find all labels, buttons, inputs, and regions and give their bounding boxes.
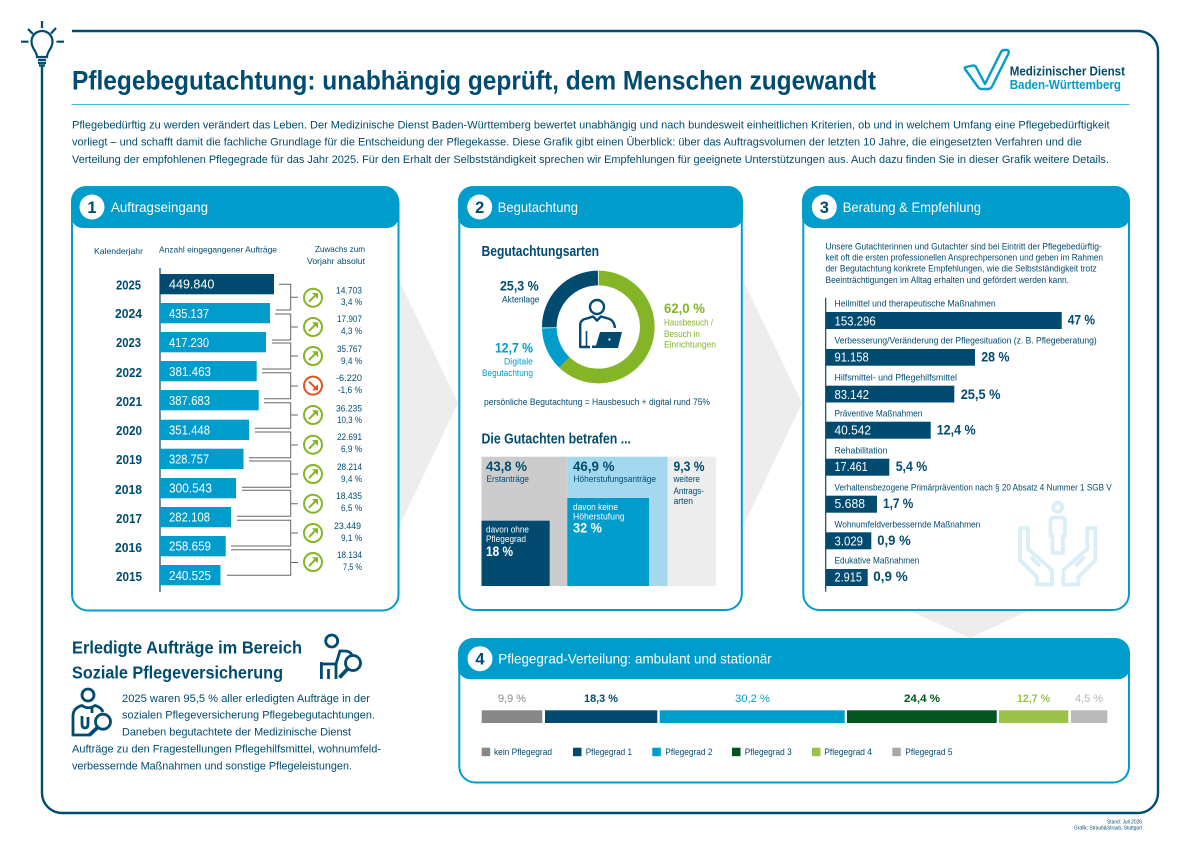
proportional block chart: davon ohne: [486, 525, 529, 535]
proportional block chart: 46,9 %: [573, 458, 615, 474]
logo: Baden-Württemberg: [1010, 78, 1121, 92]
donut labels: [482, 278, 716, 378]
stacked bar: Pflegegrade: 24,4 %: [904, 693, 940, 705]
icon: light bulb: [21, 21, 64, 66]
legend: Pflegegrad 4: [824, 747, 872, 757]
proportional block chart: weitere: [673, 474, 700, 484]
growth values: 35.767: [337, 344, 362, 354]
proportional block chart: Erstanträge: [486, 474, 529, 484]
donut labels: Aktenlage: [502, 295, 540, 305]
bar chart: Empfehlungen: 153.296: [834, 314, 876, 328]
growth values: 10,3 %: [337, 415, 362, 425]
proportional block chart: 18 %: [486, 543, 513, 559]
panel 4 header: Pflegegrad-Verteilung: ambulant und stationär: [498, 650, 772, 666]
panel 3 intro text: [826, 241, 1103, 285]
bar chart: Empfehlungen: 0,9 %: [873, 568, 908, 584]
heading: Die Gutachten betrafen: Die Gutachten betrafen ...: [482, 432, 631, 448]
stacked bar: Pflegegrade: 30,2 %: [735, 693, 770, 705]
brackets between years: [227, 284, 298, 575]
heading: [72, 637, 302, 682]
donut labels: 12,7 %: [495, 340, 533, 356]
bar chart: Empfehlungen: 40.542: [834, 423, 871, 437]
legend: [482, 747, 952, 757]
panel 3 intro text: keit oft die ersten professionellen Ansprechpersonen und geben im Rahmen: [826, 253, 1103, 263]
panel 1 header: Auftragseingang: [111, 199, 208, 215]
icon: doctor with magnifier: [73, 689, 110, 735]
proportional block chart: davon keine: [573, 502, 618, 512]
stacked bar: Pflegegrade: 9,9 %: [498, 693, 526, 705]
donut chart: [529, 258, 668, 396]
panel 3 header: 3: [820, 199, 829, 217]
heading: Begutachtungsarten: Begutachtungsarten: [482, 244, 599, 260]
donut labels: Besuch in: [664, 329, 700, 339]
panel 3: Beratung & Empfehlung: [802, 186, 1130, 610]
bar chart: Aufträge je Jahr: 2017: [116, 512, 142, 526]
legend: Pflegegrad 2: [665, 747, 712, 757]
growth values: 4,3 %: [341, 326, 362, 336]
bar chart: Aufträge je Jahr: 449.840: [169, 278, 214, 292]
donut labels: Einrichtungen: [664, 340, 716, 350]
donut labels: Begutachtung: [482, 368, 533, 378]
growth values: 7,5 %: [343, 562, 362, 572]
bar chart: Aufträge je Jahr: 387.683: [169, 394, 210, 408]
bar chart: Aufträge je Jahr: 2019: [116, 453, 142, 467]
bar chart: Aufträge je Jahr: 435.137: [169, 307, 209, 321]
bar chart: Empfehlungen: Heilmittel und therapeutische Maßnahmen: [834, 299, 996, 309]
column headers: Anzahl eingegangener Aufträge: [159, 245, 277, 255]
panel 3 intro text: Beeinträchtigungen im Alltag erhalten und gefördert werden kann.: [826, 275, 1069, 285]
growth values: 22.691: [337, 432, 362, 442]
donut labels: 62,0 %: [664, 300, 706, 316]
bar chart: Aufträge je Jahr: 2018: [115, 483, 142, 497]
growth values: 3,4 %: [341, 297, 362, 307]
flow chevron: panel 2 to 3: [743, 280, 802, 527]
bar chart: Aufträge je Jahr: 258.659: [169, 540, 211, 554]
note: personal assessment: persönliche Begutachtung = Hausbesuch + digital rund 75%: [484, 397, 710, 407]
proportional block chart: 9,3 %: [674, 458, 705, 474]
bar chart: Empfehlungen: 47 %: [1068, 311, 1095, 327]
bar chart: Empfehlungen: [826, 298, 1112, 592]
panel 2 header: Begutachtung: [498, 199, 578, 215]
intro text: vorliegt – und schafft damit die fachliche Grundlage für die Entscheidung der Pflegekasse. Diese Grafik gibt einen Überblick: über das Auftragsvolumen der letzten 10 Jahre, die eingesetzten Verfahren und die: [72, 137, 1082, 149]
bar chart: Aufträge je Jahr: 282.108: [169, 510, 210, 524]
bar chart: Empfehlungen: 0,9 %: [877, 532, 911, 548]
panel 4: Pflegegrad-Verteilung: [458, 638, 1130, 782]
title: Pflegebegutachtung: unabhängig geprüft, dem Menschen zugewandt: [72, 65, 876, 95]
heading: Erledigte Aufträge im Bereich: [72, 637, 302, 657]
bar chart: Aufträge je Jahr: 2021: [116, 395, 142, 409]
panel 3 header: [802, 186, 1130, 228]
stacked bar: Pflegegrade: 18,3 %: [584, 693, 618, 705]
footer credits: Stand: Juli 2026: [1107, 820, 1142, 826]
panel 1 header: 1: [87, 199, 97, 217]
column headers: Kalenderjahr: [94, 246, 143, 256]
proportional block chart: arten: [674, 496, 693, 506]
icon: person with laptop: [580, 300, 622, 348]
bar chart: Empfehlungen: Präventive Maßnahmen: [834, 409, 922, 419]
proportional block chart: Höherstufungsanträge: [574, 474, 656, 484]
panel 4 header: 4: [475, 651, 485, 669]
bar chart: Aufträge je Jahr: 2022: [116, 366, 142, 380]
panel 1 header: [71, 186, 399, 228]
panel 1: Auftragseingang: [71, 186, 399, 610]
growth values: -6.220: [336, 373, 362, 383]
growth values: 6,9 %: [341, 444, 362, 454]
stacked bar: Pflegegrade: 12,7 %: [1017, 693, 1050, 705]
proportional block chart: 32 %: [573, 520, 602, 536]
growth values: 36.235: [336, 404, 362, 414]
column headers: Vorjahr absolut: [307, 256, 366, 266]
bar chart: Aufträge je Jahr: 2025: [116, 278, 141, 292]
bar chart: Empfehlungen: 1,7 %: [883, 495, 914, 511]
panel 3 intro text: Unsere Gutachterinnen und Gutachter sind bei Eintritt der Pflegebedürftig-: [826, 241, 1102, 251]
growth values: 17.907: [337, 314, 362, 324]
bar chart: Empfehlungen: 25,5 %: [961, 386, 1001, 402]
panel 4 header: [458, 638, 1130, 679]
panel 2 header: 2: [475, 199, 484, 217]
bar chart: Empfehlungen: 83.142: [834, 388, 869, 402]
intro text: Pflegebedürftig zu werden verändert das Leben. Der Medizinische Dienst Baden-Württemberg bewertet unabhängig und nach bundesweit einheitlichen Kriterien, ob und in welchem Umfang eine Pflegebedürftigkeit: [72, 120, 1110, 132]
bar chart: Empfehlungen: Verhaltensbezogene Primärprävention nach § 20 Absatz 4 Nummer 1 SGB V: [834, 483, 1112, 493]
proportional block chart: 43,8 %: [486, 458, 528, 474]
heading: Soziale Pflegeversicherung: [72, 662, 283, 682]
icon: hands holding person: [1020, 503, 1095, 584]
bar chart: Empfehlungen: Wohnumfeldverbessernde Maßnahmen: [834, 520, 980, 530]
donut labels: 25,3 %: [500, 278, 539, 294]
logo: [965, 50, 1126, 92]
body text: 2025 waren 95,5 % aller erledigten Aufträge in der: [122, 693, 370, 705]
bar chart: Empfehlungen: Hilfsmittel- und Pflegehilfsmittel: [834, 373, 957, 383]
bar chart: Empfehlungen: 12,4 %: [937, 422, 976, 438]
growth values: -1,6 %: [338, 385, 362, 395]
body text: verbessernde Maßnahmen und sonstige Pflegeleistungen.: [72, 761, 352, 773]
proportional block chart: [482, 457, 716, 586]
growth values: 18.134: [337, 550, 362, 560]
growth values: 18.435: [336, 491, 362, 501]
flow chevron: panel 3 to 4: [910, 611, 1028, 638]
section: Erledigte Aufträge: [72, 635, 381, 773]
bar chart: Empfehlungen: Rehabilitation: [834, 446, 887, 456]
stacked bar: Pflegegrade: 4,5 %: [1075, 693, 1103, 705]
bar chart: Aufträge je Jahr: 2020: [116, 424, 142, 438]
footer credits: Grafik: Straub&Straub, Stuttgart: [1074, 826, 1143, 832]
legend: Pflegegrad 1: [586, 747, 632, 757]
panel 3 header: Beratung & Empfehlung: [843, 199, 981, 215]
bar chart: Aufträge je Jahr: 381.463: [169, 365, 211, 379]
bar chart: Aufträge je Jahr: 2015: [116, 570, 142, 584]
intro text: Verteilung der empfohlenen Pflegegrade für das Jahr 2025. Für den Erhalt der Selbstständigkeit sprechen wir Empfehlungen für geeignete Unterstützungen aus. Auch dazu finden Sie in dieser Grafik weitere Details.: [72, 154, 1109, 166]
flow chevron: panel 1 to 2: [399, 280, 458, 527]
icons: trend arrows: [304, 289, 322, 571]
column headers: [94, 244, 366, 266]
proportional block chart: Pflegegrad: [486, 534, 526, 544]
body text: [72, 693, 381, 773]
panel 2: Begutachtung: [458, 186, 743, 610]
bar chart: Empfehlungen: 28 %: [981, 348, 1010, 364]
proportional block chart: Höherstufung: [573, 512, 624, 522]
body text: sozialen Pflegeversicherung Pflegebegutachtungen.: [122, 709, 375, 721]
bar chart: Aufträge je Jahr: 300.543: [169, 482, 212, 496]
column headers: Zuwachs zum: [315, 244, 365, 254]
logo: Medizinischer Dienst: [1010, 64, 1126, 78]
footer credits: [1074, 820, 1143, 832]
legend: Pflegegrad 3: [745, 747, 792, 757]
stacked bar: Pflegegrade: [482, 693, 1107, 723]
intro text: [72, 120, 1110, 166]
legend: Pflegegrad 5: [905, 747, 952, 757]
bar chart: Aufträge je Jahr: 2024: [115, 307, 142, 321]
bar chart: Empfehlungen: 5,4 %: [896, 458, 928, 474]
bar chart: Aufträge je Jahr: [115, 268, 274, 592]
bar chart: Empfehlungen: Verbesserung/Veränderung der Pflegesituation (z. B. Pflegeberatung): [834, 336, 1097, 346]
growth values: 9,1 %: [341, 533, 362, 543]
bar chart: Aufträge je Jahr: 328.757: [169, 452, 209, 466]
growth values: 28.214: [337, 462, 362, 472]
bar chart: Empfehlungen: 91.158: [834, 350, 869, 364]
icon: seated person with magnifier: [321, 635, 360, 679]
body text: Daneben begutachtete der Medizinische Dienst: [122, 727, 351, 739]
body text: Aufträge zu den Fragestellungen Pflegehilfsmittel, wohnumfeld-: [72, 744, 381, 756]
bar chart: Empfehlungen: 2.915: [834, 570, 862, 584]
bar chart: Aufträge je Jahr: 240.525: [169, 569, 211, 583]
legend: kein Pflegegrad: [494, 747, 552, 757]
bar chart: Aufträge je Jahr: 2016: [115, 541, 142, 555]
bar chart: Empfehlungen: Edukative Maßnahmen: [834, 556, 919, 566]
donut labels: Hausbesuch /: [664, 318, 713, 328]
bar chart: Aufträge je Jahr: 2023: [116, 336, 141, 350]
donut labels: Digitale: [504, 357, 533, 367]
bar chart: Aufträge je Jahr: 417.230: [169, 336, 209, 350]
growth values: 14.703: [336, 285, 362, 295]
growth values: [334, 285, 362, 572]
growth values: 6,5 %: [341, 503, 362, 513]
panel 2 header: [458, 186, 743, 228]
bar chart: Empfehlungen: 3.029: [834, 534, 863, 548]
panel 3 intro text: der Begutachtung konkrete Empfehlungen, wie die Selbstständigkeit trotz: [826, 264, 1097, 274]
bar chart: Empfehlungen: 5.688: [834, 497, 865, 511]
growth values: 23.449: [334, 521, 361, 531]
bar chart: Aufträge je Jahr: 351.448: [169, 424, 210, 438]
bar chart: Empfehlungen: 17.461: [834, 460, 868, 474]
growth values: 9,4 %: [341, 474, 362, 484]
growth values: 9,4 %: [341, 356, 362, 366]
proportional block chart: Antrags-: [674, 486, 704, 496]
